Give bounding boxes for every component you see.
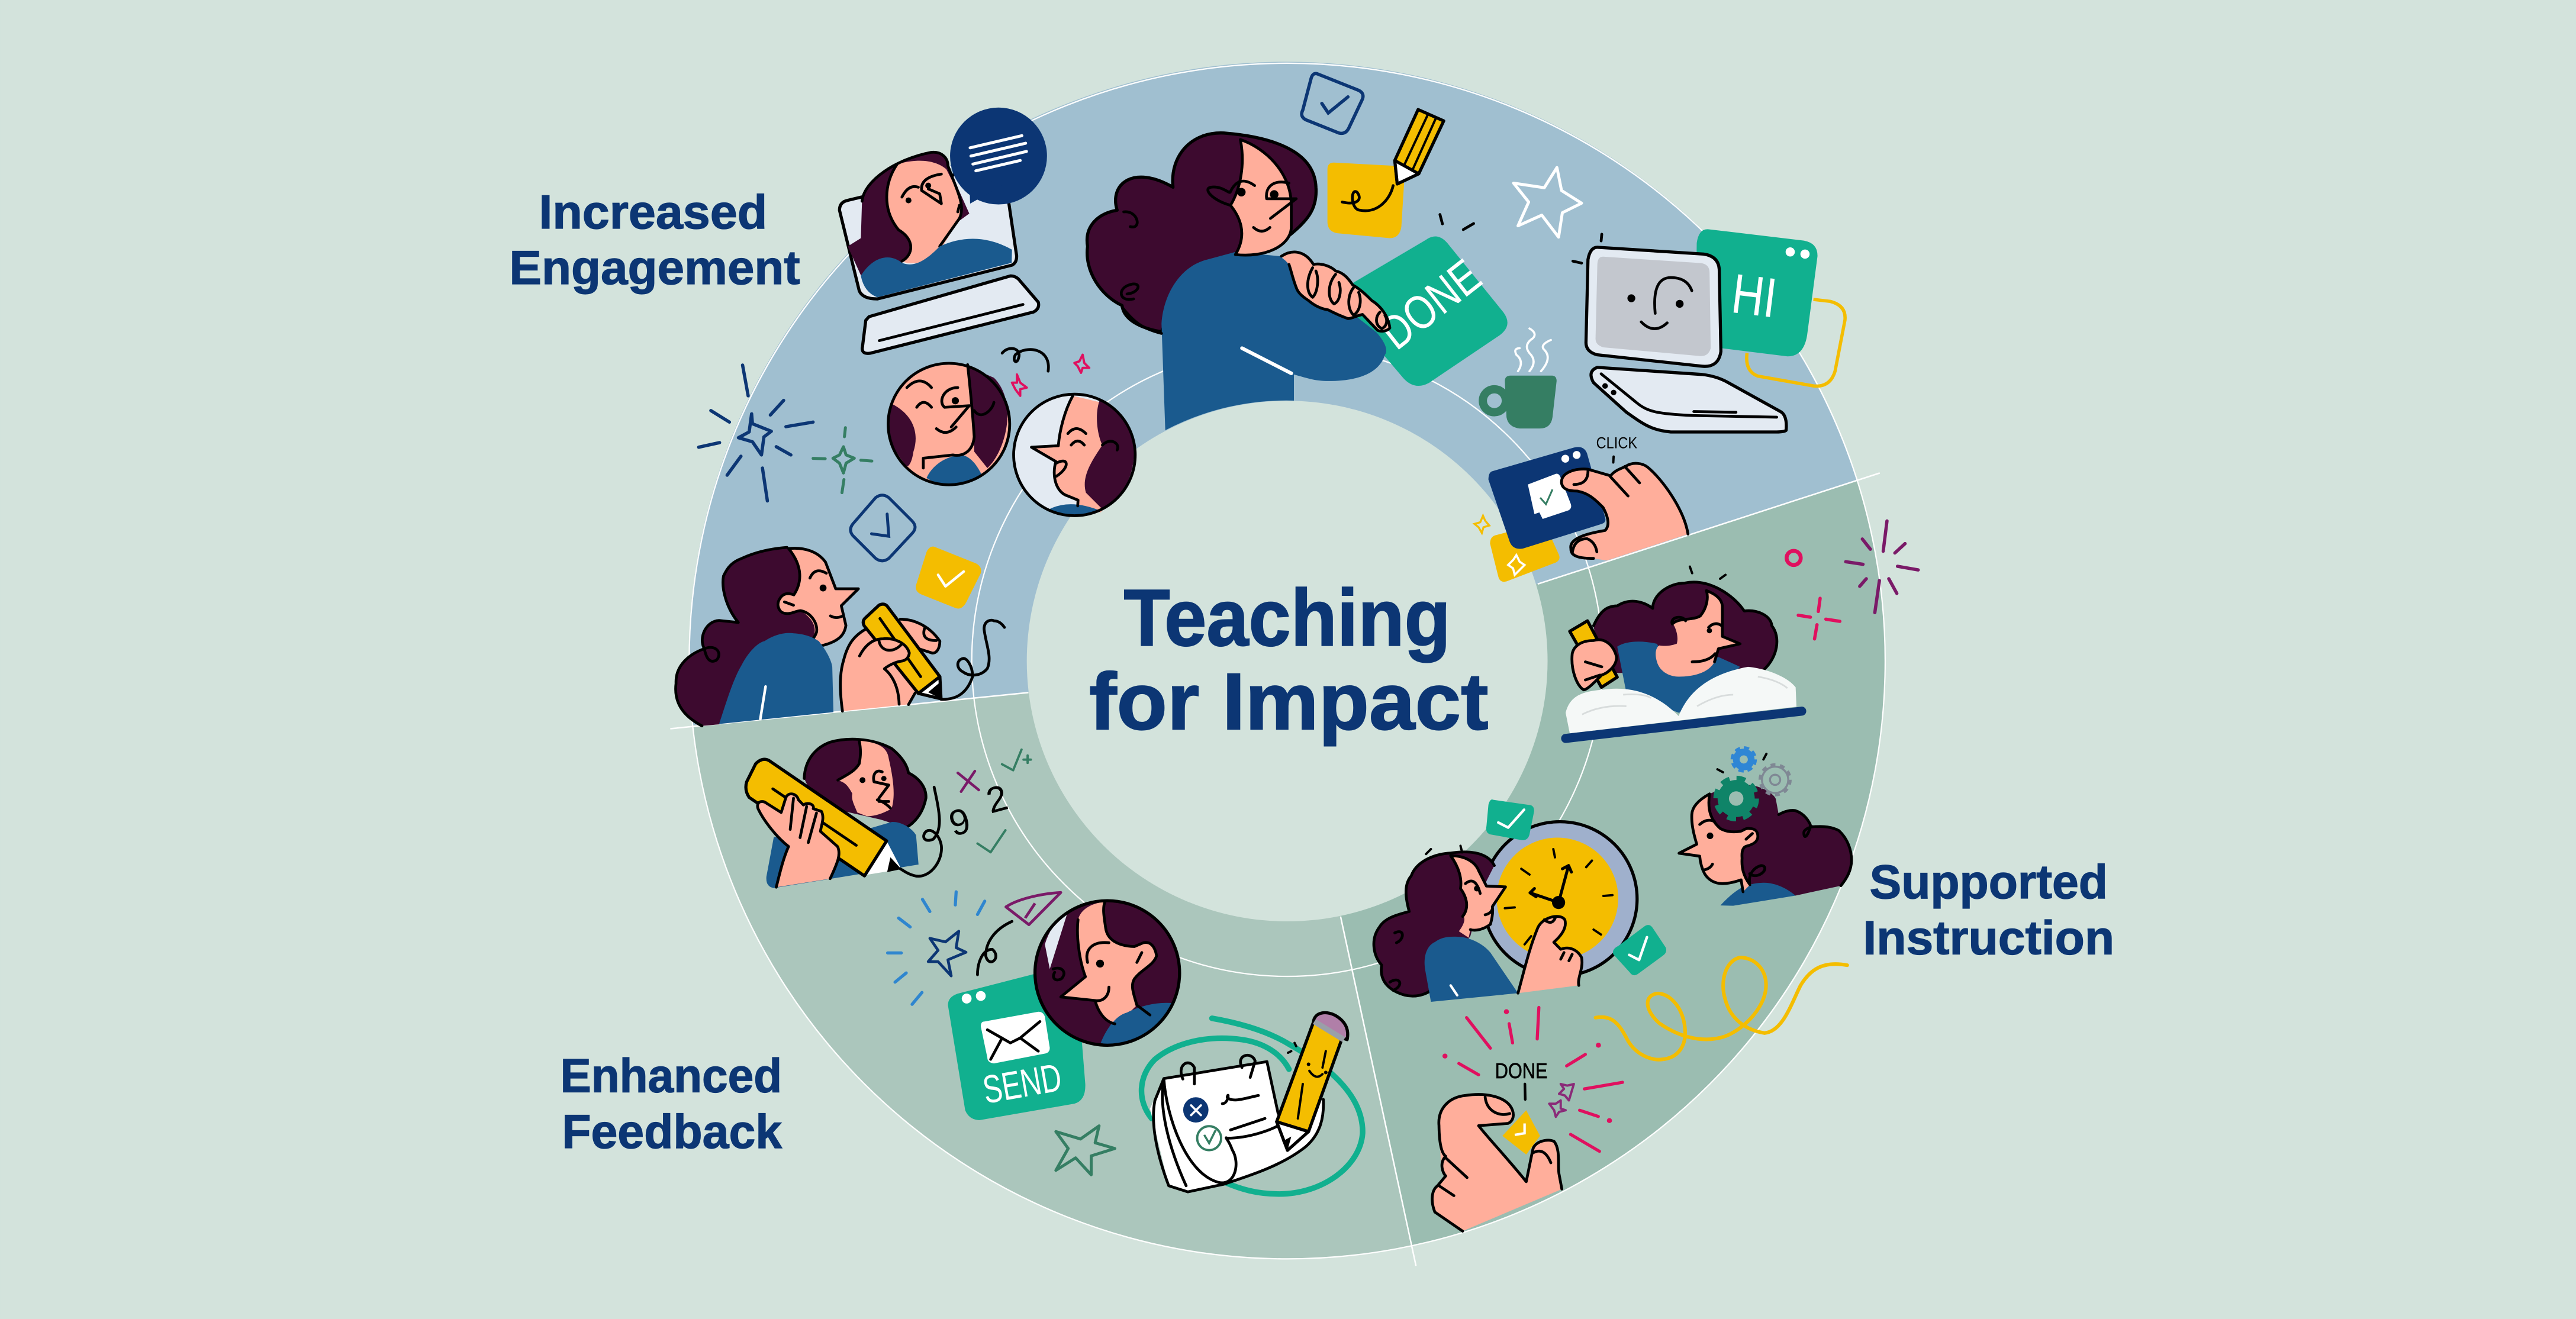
icon: pencil	[1395, 109, 1444, 184]
panel: supported instruction illustrations	[1374, 521, 1918, 1231]
illustration: clock	[1483, 822, 1637, 976]
icon: marks and checks	[958, 750, 1031, 852]
icon: navy star	[928, 931, 966, 976]
illustration: large face circle	[1035, 901, 1180, 1045]
icon: navy speech bubble	[950, 108, 1047, 205]
panel: ring sectors	[670, 62, 1885, 1266]
icon: green sparkle	[813, 428, 872, 493]
heading: Enhanced Feedback: Feedback	[562, 1105, 782, 1159]
illustration: woman holding ruler	[746, 739, 942, 888]
illustration: woman hugging	[1087, 133, 1390, 430]
icon: green SEND window: SEND	[980, 1056, 1065, 1112]
icon: green HI window: HI	[1728, 262, 1780, 329]
icon: green SEND window	[948, 969, 1086, 1120]
icon: green DONE card	[1331, 236, 1508, 386]
heading: Enhanced Feedback	[560, 1050, 782, 1159]
icon: yellow outline rectangle	[1747, 299, 1845, 386]
title: for Impact	[1089, 656, 1489, 746]
icon: yellow squiggle	[1596, 957, 1847, 1060]
icon: blue dashes	[888, 892, 985, 1004]
illustration: woman reading book	[1566, 567, 1802, 738]
icon: pink ring and cross	[1786, 551, 1840, 639]
heading: Supported Instruction: Supported	[1870, 856, 2108, 909]
illustration: smiling face circle left	[888, 363, 1010, 485]
icon: yellow note with scribble	[1328, 163, 1405, 238]
icon: pink burst around DONE	[1445, 1007, 1622, 1152]
illustration: woman pointing at clock	[1374, 846, 1582, 1002]
heading: Increased Engagement: Increased	[539, 186, 767, 239]
text: handwritten numbers	[945, 777, 1012, 844]
title: Teaching	[1123, 573, 1451, 663]
icon: green HI window	[1695, 229, 1818, 356]
label: DONE: DONE	[1495, 1059, 1548, 1083]
icon: yellow check note	[916, 547, 981, 609]
icon: outlined check diamond	[851, 495, 915, 561]
icon: paper plane with trail	[977, 892, 1061, 975]
illustration: woman with gears	[1679, 748, 1852, 906]
illustration: hand clicking	[1561, 434, 1688, 560]
icon: purple burst	[1846, 521, 1918, 612]
icon: green star	[1056, 1126, 1115, 1175]
text: handwritten numbers: 2	[982, 777, 1012, 821]
heading: Supported Instruction	[1863, 856, 2114, 965]
heading: Enhanced Feedback: Enhanced	[560, 1050, 782, 1103]
illustration: hand holding note	[1432, 1095, 1562, 1231]
icon: purple sparkles	[1549, 1084, 1574, 1117]
icon: black squiggle and pink sparkles	[1002, 349, 1089, 396]
title	[1089, 573, 1489, 746]
panel: increased engagement illustrations	[675, 73, 1845, 726]
tick marks	[1440, 214, 1602, 263]
icon: white star	[1514, 167, 1582, 237]
text: handwritten numbers: 9	[945, 800, 974, 844]
panel: enhanced feedback illustrations	[746, 739, 1363, 1194]
illustration: notebook and pencil with ring	[1142, 1012, 1363, 1194]
illustration: woman with marker	[675, 547, 1004, 726]
illustration: hand clicking: CLICK	[1596, 434, 1637, 452]
icon: navy window being clicked	[1489, 447, 1605, 549]
illustration: smiling laptop	[1586, 247, 1786, 432]
icon: green check notes	[1486, 799, 1666, 975]
heading: Increased Engagement	[509, 186, 800, 295]
icon: green DONE card: DONE	[1370, 249, 1491, 360]
illustration: woman on video call laptop	[839, 152, 1039, 353]
icon: yellow note with sparkle	[1474, 516, 1560, 582]
icon: outlined check box top	[1302, 73, 1363, 133]
icon: navy sparkle burst	[698, 365, 813, 501]
heading: Increased Engagement: Engagement	[509, 241, 800, 295]
heading: Supported Instruction: Instruction	[1863, 912, 2114, 965]
illustration: laughing face circle right	[1013, 394, 1135, 516]
label: DONE	[1495, 1059, 1548, 1099]
icon: green coffee mug	[1483, 328, 1557, 428]
